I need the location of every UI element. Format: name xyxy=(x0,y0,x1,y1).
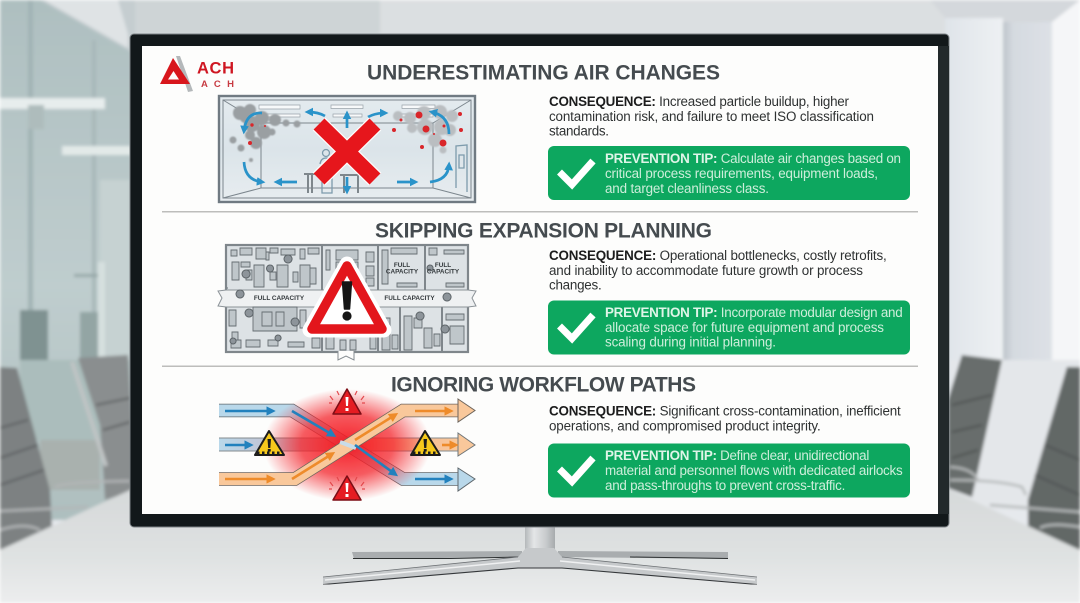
capacity labels: FULL CAPACITY xyxy=(384,295,435,302)
middle path xyxy=(219,438,459,452)
consequence text 3 xyxy=(549,404,901,434)
chairs xyxy=(78,355,136,500)
particles xyxy=(248,112,463,149)
airflow arrows xyxy=(244,112,449,191)
consequence text 2: changes. xyxy=(549,278,602,292)
check icon xyxy=(560,458,593,482)
doors xyxy=(338,351,354,360)
wall and column, right xyxy=(945,0,1005,500)
consequence text 1: standards. xyxy=(549,124,609,138)
illustration: crowded floor plan xyxy=(218,245,476,360)
red alert bottom xyxy=(329,476,365,500)
capacity labels: CAPACITY xyxy=(386,268,419,276)
consequence text 2: CONSEQUENCE: Operational bottlenecks, costly retrofits, xyxy=(549,248,887,263)
warning triangle xyxy=(310,264,384,330)
title: section 3: IGNORING WORKFLOW PATHS xyxy=(391,374,696,396)
check icon xyxy=(560,161,593,184)
prevention tip 1: and target cleanliness class. xyxy=(605,181,769,196)
blue crossing path xyxy=(219,410,460,479)
title: section 1: UNDERESTIMATING AIR CHANGES xyxy=(367,62,720,84)
front legs xyxy=(323,548,757,584)
monitor stand xyxy=(323,527,757,584)
capacity labels xyxy=(254,262,460,302)
check icon xyxy=(560,315,593,338)
red alert top xyxy=(329,389,365,414)
prevention tip 1: critical process requirements, equipment loads, xyxy=(605,166,878,181)
neck xyxy=(525,527,555,559)
contamination cloud, right xyxy=(393,105,458,154)
table top xyxy=(0,490,1080,603)
person and equipment xyxy=(304,145,467,193)
orange crossing path xyxy=(219,410,460,479)
consequence text 2: and inability to accommodate future growth or process xyxy=(549,263,863,278)
contamination cloud, left xyxy=(230,104,300,162)
furniture xyxy=(227,248,464,350)
prevention tip 2 xyxy=(548,300,910,354)
illustration: crossing workflow paths xyxy=(219,389,475,501)
title: section 2: SKIPPING EXPANSION PLANNING xyxy=(375,220,712,242)
yellow caution right xyxy=(411,431,440,455)
prevention tip 1: PREVENTION TIP: Calculate air changes based on xyxy=(605,151,901,166)
prevention tip 2: PREVENTION TIP: Incorporate modular design and xyxy=(605,305,903,320)
corridor xyxy=(218,290,476,307)
prevention tip 2: allocate space for future equipment and process xyxy=(605,320,884,335)
yellow caution left xyxy=(255,431,284,455)
prevention tip 3: material and personnel flows with dedicated airlocks xyxy=(605,463,903,478)
prevention tip 3: PREVENTION TIP: Define clear, unidirectional xyxy=(605,448,869,463)
red glow xyxy=(263,389,431,501)
screen panel xyxy=(142,46,938,514)
consequence text 1: contamination risk, and failure to meet ISO classification xyxy=(549,109,874,124)
capacity labels: FULL xyxy=(435,262,451,269)
capacity labels: FULL CAPACITY xyxy=(254,295,305,302)
prevention tip 1 xyxy=(548,146,910,200)
consequence text 3: CONSEQUENCE: Significant cross-contamination, inefficient xyxy=(549,404,901,419)
consequence text 3: operations, and compromised product integrity. xyxy=(549,419,821,434)
consequence text 1: CONSEQUENCE: Increased particle buildup, higher xyxy=(549,94,850,109)
blue inner arrows xyxy=(225,411,450,479)
back legs xyxy=(352,551,522,559)
capacity labels: FULL xyxy=(394,262,410,269)
prevention tip 3 xyxy=(548,444,910,498)
consequence text 1 xyxy=(549,94,874,138)
illustration: cleanroom airflow xyxy=(219,96,475,202)
prevention tip 3: and pass-throughs to prevent cross-traffic. xyxy=(605,478,845,493)
glass wall, left xyxy=(0,0,135,520)
capacity labels: CAPACITY xyxy=(427,268,460,276)
logo: A C H xyxy=(201,79,234,90)
back chairs behind glass xyxy=(20,310,48,360)
logo: ACH xyxy=(197,60,234,78)
orange inner arrows xyxy=(225,411,455,479)
monitor bezel xyxy=(130,34,949,527)
prevention tip 2: scaling during initial planning. xyxy=(605,334,776,350)
consequence text 2 xyxy=(549,248,887,292)
red X xyxy=(319,124,375,179)
logo xyxy=(160,56,234,92)
